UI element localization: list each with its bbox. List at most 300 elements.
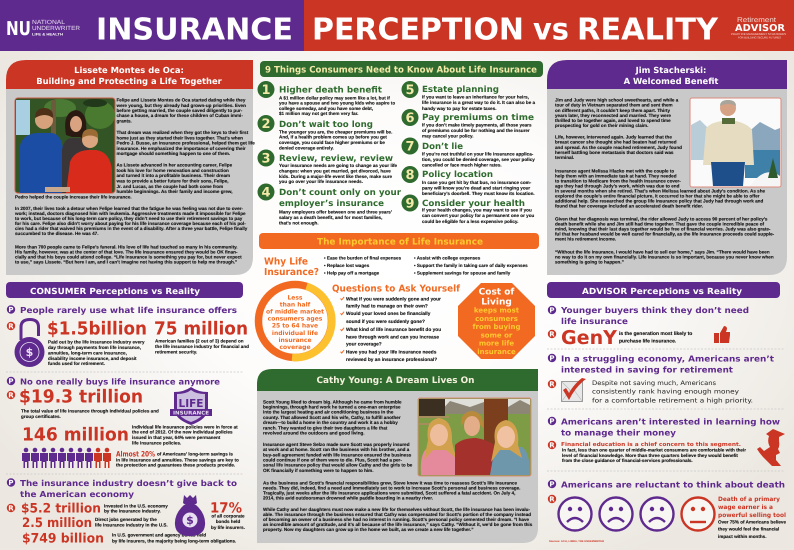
perception 1 heading [548, 305, 749, 326]
story text: beginnings, through hard work he turned a one-man enterprise [263, 404, 401, 410]
why life insurance: Insurance? [264, 267, 319, 278]
icon: row of ten people [22, 448, 111, 468]
perception 2 heading: interested in saving for retirement [561, 365, 733, 375]
item 2: coverage, you could face higher premiums or be [279, 140, 385, 145]
icon: checkbox with red check [562, 378, 586, 402]
panel: consumer perceptions vs reality [6, 282, 249, 547]
perception 3 heading [548, 416, 780, 438]
photo: family [15, 98, 115, 193]
item 1: 1 [261, 83, 271, 98]
perception 1 heading: Younger buyers think they don’t need [560, 305, 749, 315]
title: INSURANCE [96, 12, 293, 47]
stat: 2.5 million: Direct jobs generated by the [95, 517, 157, 522]
stat: $19.3 trillion: group certificates. [21, 414, 61, 419]
donut callout: 25 to 64 have [272, 323, 318, 330]
questions to ask yourself: your coverage? [346, 342, 382, 348]
perception 3 heading [7, 478, 237, 499]
questions to ask yourself: sound if you were suddenly gone? [346, 319, 425, 325]
heading: Cathy Young: A Dream Lives On [316, 376, 474, 386]
heading bar [259, 233, 539, 249]
item 5: handy way to pay for estate taxes. [422, 106, 497, 111]
item 2: 2 [261, 117, 271, 132]
item 6: may cancel your policy. [422, 134, 474, 138]
logo: National Underwriter: UNDERWRITER [32, 25, 81, 32]
icon: money bag [175, 495, 205, 536]
reality text: Despite not saving much, Americans [592, 380, 716, 387]
panel: Lissete Montes de Oca story [6, 60, 255, 275]
item 2 [258, 115, 392, 150]
story text: In 2007, their lives took a detour when Felipe learned that the fatigue he was feeling was not due to over- [15, 206, 243, 211]
item 3: you go over your life insurance needs. [279, 179, 363, 184]
story text [263, 399, 533, 532]
item 6: 6 [405, 111, 415, 126]
icon: money bag: $ [186, 514, 194, 527]
item 5: 5 [405, 83, 415, 98]
stat: 17% [210, 500, 245, 530]
story text: an incredible amount of gratitude, and it’s all because of the life insurance,” says Cathy. “Without it, we’d be gone from this [263, 522, 533, 527]
item 9: Consider your health [422, 199, 525, 209]
icon: life insurance shield badge: INSURANCE [173, 411, 210, 417]
story text: Insurance agent Steve Selzo made sure Scott was properly insured [263, 442, 410, 447]
item 4: Don’t count only on your [279, 188, 402, 198]
why life insurance: • Ease the burden of final expenses [324, 256, 402, 261]
stat: almost 20% [116, 450, 239, 468]
item 2: And, if a health problem comes up before you get [279, 135, 387, 140]
item 5: If you want to leave an inheritance for your heirs, [422, 95, 529, 100]
stop sign callout: cost of living: Cost of [479, 288, 514, 298]
stat: Gen Y: R [549, 330, 555, 338]
story text: county. That allowed Scott and his wife, Cathy, to fulfill another [263, 415, 401, 420]
heading bar [6, 282, 243, 298]
stat: $5.2 trillion: by the insurance industry. [104, 509, 161, 514]
item 3: changes: when you get married, get divorced, have [279, 168, 391, 173]
reality: financial education: level of financial knowledge. More than three quarters believe they would benefit [562, 453, 738, 458]
stat: $5.2 trillion: Invested in the U.S. economy [104, 503, 168, 508]
stop sign callout: cost of living: insurance [477, 348, 516, 356]
why life insurance: Why Life [264, 256, 308, 268]
perception 1 heading: People rarely use what life insurance offers [20, 305, 237, 315]
donut callout: than half [280, 301, 311, 308]
item 4: Many employers offer between one and three years’ [279, 209, 392, 214]
story text: property. Now my daughters can grow up in the home we built, as we create a new life together.” [263, 527, 474, 532]
perception 3 heading: P [549, 418, 555, 426]
item 8 [402, 166, 535, 196]
story text: Scott Young liked to dream big. Although he came from humble [263, 399, 402, 404]
stat: 17%: bonds held [216, 519, 240, 524]
heading bar [547, 282, 780, 298]
story text: found that her coverage included an accelerated death benefit rider. [555, 204, 703, 209]
item 7: cancelled or face much higher rates. [422, 162, 502, 168]
logo: Retirement Advisor: PRACTICE MANAGEMENT STRATEGIES [731, 32, 786, 36]
item 9: If your health changes, you may want to see if you [422, 208, 532, 213]
item 1: Higher death benefit [279, 86, 382, 96]
questions to ask yourself: What if you were suddenly gone and your [346, 296, 441, 302]
story text: cially and that his boys could attend college. “Life insurance is something you pay for, but never expect [15, 254, 242, 260]
item 8: beneficiary’s doorbell. They must know its location. [422, 191, 535, 196]
source note: Sources: ACLI, LIMRA, THE UNDERWRITER [549, 540, 604, 543]
icon: neutral red face [682, 498, 714, 530]
perception 3 heading: the American economy [20, 489, 135, 499]
stat: 75 million: 75 million [154, 318, 248, 340]
item 2: The younger you are, the cheaper premiums will be. [279, 129, 392, 134]
story text: mind, knowing that their last days together would be free of financial worries. Judy was also grate- [555, 227, 771, 232]
story text: Insurance agent Melissa Hlacko met with the couple to [555, 169, 674, 174]
item 5: life insurance is a great way to do it. It can also be a [422, 100, 536, 105]
story text: Given that her diagnosis was terminal, the rider allowed Judy to access 90 percent of her policy’s [555, 217, 768, 222]
donut callout: consumers ages [268, 316, 323, 323]
story text: ful that her husband would be well cared for financially, as the life insurance proceeds could supple- [555, 232, 775, 237]
stat: 146 million: the end of 2012. Of the new individual policies [132, 430, 233, 435]
story text: herself battling bone metastasis that doctors said was [555, 150, 674, 155]
stat: $1.5 billion: funds used for retirement. [48, 361, 105, 366]
item 8: In case you get hit by that bus, no insurance com- [422, 180, 532, 185]
stat: 146 million: life insurance policies. [132, 440, 181, 446]
story text: to transition to Medicare from the health insurance cover- [555, 179, 681, 184]
stat: Gen Y: purchase life insurance. [619, 339, 677, 345]
stat: almost 20%: Almost 20% [116, 450, 155, 458]
stop sign callout: cost of living: some or [481, 331, 513, 339]
story text: tour of duty in Vietnam separated them and sent them [555, 103, 673, 108]
story text: cies had a rider that waived his premiums in the event of a disability. After a three year battle, Felipe finally [15, 226, 248, 231]
item 4: 4 [261, 186, 271, 201]
icon: thumbs up [714, 326, 730, 343]
story text: death benefit while she and Jim still had time together. That gave the couple incredible peace of [555, 222, 765, 227]
story text: prospecting for gold on their mining claim. [555, 123, 648, 128]
story text: Jim and Judy were high school sweethearts, and while a [555, 98, 679, 103]
logo: Retirement Advisor: ADVISOR [735, 23, 786, 34]
panel: importance of life insurance [258, 233, 539, 363]
item 7: 7 [405, 140, 415, 155]
stat: 2.5 million: life insurance industry in the U.S. [95, 522, 168, 527]
item 1: A $1 million dollar policy may seem like a lot, but if [279, 95, 390, 100]
questions to ask yourself [332, 284, 461, 363]
reality text: for a comfortable retirement a high priority. [592, 397, 753, 404]
story text: ranch. They wanted to give their two daughters a life that [263, 425, 388, 430]
stat: $19.3 trillion: The total value of life insurance through individual policies and [21, 409, 159, 414]
icon: reality marker: R [549, 496, 555, 504]
story text: chase a house, a dream for these children of Cuban immi- [116, 113, 243, 118]
stat: 146 million: 146 million [22, 424, 129, 446]
why life insurance [264, 256, 528, 278]
why life insurance: • Supplement savings for spouse and family [414, 270, 511, 275]
panel: 9 things consumers need to know [258, 61, 543, 226]
stat: $5.2 trillion: R [8, 504, 14, 512]
perception 4 heading: Americans are reluctant to think about death [561, 480, 785, 490]
reality: financial education: Financial education is a chief concern to this segment. [561, 441, 741, 448]
stat: 17%: 17% [210, 500, 242, 516]
logo: National Underwriter: NU [6, 18, 31, 40]
perception 4 heading: P [549, 480, 555, 488]
story text: As Lissete advanced in her accounting career, Felipe [116, 163, 233, 168]
callout: death of primary wage earner: Over 75% of Americans believe [718, 519, 786, 524]
stop sign callout: cost of living: from buying [472, 323, 520, 331]
story text: terminal. [555, 155, 574, 160]
item 1: $1 million may not get them very far. [279, 111, 358, 116]
icon: reality marker: R [549, 380, 555, 388]
header banner [0, 0, 794, 51]
logo: National Underwriter: LIFE & HEALTH [32, 32, 63, 36]
stat: $749 billion: by life insurers, the majority being long-term obligations. [112, 538, 236, 543]
story text: grants. [116, 118, 132, 123]
callout: death of primary wage earner: they would feel the financial [718, 527, 779, 532]
questions to ask yourself: Questions to Ask Yourself [332, 284, 461, 294]
perception 1 heading: P [8, 306, 14, 314]
stat: Gen Y [548, 327, 692, 349]
title: PERCEPTION [312, 12, 524, 47]
story text: age they had through Judy’s work, which was due to end [555, 184, 680, 189]
heading bar: ADVISOR Perceptions vs Reality [582, 286, 743, 296]
story text: was to provide a better future for their sons, Felipe, [116, 178, 229, 184]
item 1: college someday, and you have some debt, [279, 106, 373, 111]
stat: $1.5 billion: disability income insurance, and deposit [48, 356, 137, 361]
icon: padlock with dollar [14, 320, 44, 367]
donut callout: individual life [272, 330, 318, 337]
stat: almost 20%: in life insurance and annuities. These savings are key to [116, 457, 239, 462]
story text: While Cathy and her daughters must now make a new life for themselves without Scott, the life insurance has been invalu- [263, 507, 530, 512]
questions to ask yourself: family had to manage on their own? [346, 304, 428, 310]
story text: thrilled to be together again, and loved to spend time [555, 118, 671, 123]
story text: could continue if one of them were to die. Plus, Scott had a per- [263, 458, 402, 462]
story text: More than 700 people came to Felipe’s funeral. His love of life had touched so many in his community. [15, 244, 238, 249]
story text: “Without the life insurance, I would have had to sell our home,” says Jim. “There would have been [555, 250, 770, 255]
story text [14, 98, 255, 265]
stop sign callout: cost of living: Living [481, 297, 512, 307]
title [96, 12, 719, 47]
item 3: kids. During a major-life event like these, make sure [279, 174, 393, 179]
story text [555, 98, 775, 265]
perception 3 heading: to manage their money [561, 428, 677, 438]
heading: Building and Protecting a Life Together [36, 76, 223, 86]
stat: $19.3 trillion: $19.3 trillion [19, 386, 143, 408]
story text: something is going to happen.” [555, 260, 624, 265]
story text: of becoming an owner of a business she had no interest in running. Scott’s personal policy cemented their dream. “I have [263, 517, 530, 522]
item 4: salary as a death benefit, and for most families, [279, 215, 382, 220]
stat: 75 million: the life insurance industry for financial and [155, 344, 249, 349]
item 2: denied coverage entirely. [279, 146, 334, 150]
item 7 [402, 138, 535, 168]
perception 1 heading: P [549, 306, 555, 314]
story text: Felipe and Lissete Montes de Oca started dating while they [116, 98, 246, 103]
donut callout [258, 284, 332, 358]
story text: OK financially if something were to happen to him. [263, 468, 374, 473]
panel: Cathy Young story [257, 369, 538, 543]
perception 2 heading: P [8, 378, 14, 386]
reality: financial education: R [549, 442, 555, 450]
stat: $1.5 billion: Paid out by the life insurance industry every [48, 340, 145, 345]
item 3: 3 [261, 152, 271, 167]
donut callout: coverage [279, 344, 311, 351]
story text: years later, they reconnected and married. They were [555, 113, 671, 118]
stat: almost 20%: of Americans’ long-term savings is [157, 452, 233, 457]
heading: Lissete Montes de Oca: [74, 65, 184, 75]
stat: 17%: of all corporate [211, 514, 245, 519]
story text: humble beginnings. As their family and income grew, [116, 189, 233, 194]
item 9: 9 [405, 197, 415, 212]
callout: death of primary wage earner: wage earner is a [718, 504, 773, 511]
why life insurance: • Assist with college expenses [414, 256, 481, 261]
callout: death of primary wage earner [718, 496, 786, 539]
icon: graduate silhouette [757, 429, 785, 466]
questions to ask yourself: What kind of life insurance benefit do you [346, 327, 441, 333]
stat: 2.5 million: 2.5 million [22, 516, 92, 531]
item 8: Policy location [422, 170, 493, 180]
story text: His family, however, was at the center of that love. The life insurance ensured they would be OK finan- [15, 249, 238, 254]
story text: insurance. He emphasized the importance of covering their [116, 146, 246, 151]
icon: life insurance shield badge: LIFE [178, 397, 204, 410]
stat: $19.3 trillion: R [8, 392, 14, 400]
stat: $19.3 trillion [7, 386, 159, 419]
item 4: employer’s insurance [279, 199, 384, 209]
stat: $1.5 billion: day through payments from life insurance, [48, 345, 141, 350]
item 7: tion, you could be denied coverage, see your policy [422, 157, 535, 162]
stat: $5.2 trillion [7, 502, 168, 517]
stat: $749 billion: In U.S. government and agency bonds held [112, 533, 206, 538]
perception 2 heading: P [549, 354, 555, 362]
story text: additional help. She researched the group life insurance policy that Judy had through work and [555, 199, 763, 204]
logo: National Underwriter [6, 18, 81, 40]
story text: were young, but they already had grown-up priorities. Even [116, 103, 246, 108]
item 7: If you’re not truthful on your life insurance applica- [422, 151, 534, 156]
story text: help them with an immediate task at hand. They needed [555, 174, 677, 179]
story text: on different paths, it couldn’t keep them apart. Thirty [555, 108, 671, 113]
story text: Tragically, just weeks after the life insurance applications were submitted, Scott suffered a fatal accident. On July 4, [263, 490, 515, 495]
logo: Retirement Advisor: Retirement [737, 16, 776, 24]
icon: life insurance shield badge [170, 387, 212, 425]
item 6: of premiums could be for nothing and the insurer [422, 128, 530, 133]
story text: Pedro helped the couple increase their life insurance. [15, 194, 132, 199]
why life insurance: • Support the family in taking care of daily expenses [414, 263, 528, 268]
callout: death of primary wage earner: impact within months. [718, 534, 766, 539]
reality: financial education [548, 441, 746, 463]
panel: advisor perceptions vs reality [547, 282, 786, 543]
perception 2 heading: In a struggling economy, Americans aren’t [561, 354, 774, 364]
item 5: Estate planning [422, 85, 499, 95]
icon: reality marker: R [8, 322, 14, 330]
item 4: that’s not enough. [279, 220, 319, 226]
item 9 [402, 194, 535, 224]
item 9: could be eligible for a less expensive policy. [422, 219, 518, 224]
stat: $5.2 trillion: $5.2 trillion [21, 502, 101, 517]
story text: explored the couple’s entire financial picture, it occurred to her that she might be able to offer [555, 194, 760, 199]
story text: buy-sell agreement funded with life insurance ensured the business [263, 452, 412, 457]
item 3: Review, review, review [279, 154, 393, 164]
stat: almost 20%: the protection and guarantees these products provide. [116, 463, 235, 468]
title: vs [533, 12, 569, 47]
logo: Retirement Advisor [731, 16, 786, 40]
story text: 2014, this avid outdoorsman drowned while paddle boarding in a nearby river. [263, 495, 433, 500]
perception 2 heading [548, 354, 774, 375]
icon: reality marker [7, 322, 15, 330]
heading: A Welcomed Benefit [624, 76, 718, 86]
story text: breast cancer she thought she had beaten had returned [555, 140, 677, 145]
story text: able. The insurance through the business ensured that Cathy was compensated for Scott’s portion of the company instead [263, 512, 531, 517]
logo: Retirement Advisor: FOR BUILDING SECURE FUTURES [738, 36, 781, 40]
perception 2 heading: No one really buys life insurance anymore [20, 376, 220, 386]
stat: $749 billion [22, 532, 236, 547]
photo: Jim [690, 98, 781, 187]
item 1 [258, 81, 395, 116]
story text: before getting married, the couple saved diligently to pur- [116, 108, 243, 113]
stat: 75 million: retirement security. [155, 349, 197, 354]
perception 3 heading: Americans aren’t interested in learning how [561, 416, 780, 426]
stop sign callout: cost of living: more life [479, 340, 514, 348]
stop sign callout: cost of living: keeps most [474, 306, 520, 314]
heading bar: 9 Things Consumers Need to Know About Life Insurance [265, 66, 537, 76]
item 7: Don’t lie [422, 142, 463, 152]
stat: 17%: by life insurers. [211, 525, 245, 530]
item 8: pany will know you’re dead and start ringing your [422, 186, 530, 191]
heading bar: CONSUMER Perceptions vs Reality [30, 286, 201, 296]
story text: and spread. As the couple reached retirement, Judy found [555, 145, 682, 150]
item 4 [258, 184, 402, 226]
logo: National Underwriter: NATIONAL [32, 19, 66, 26]
item 6: Pay premiums on time [422, 113, 534, 123]
story text: mortgage should something happen to one of them. [116, 151, 230, 156]
heading: Jim Stacherski: [635, 65, 706, 75]
perception 1 heading: life insurance [561, 316, 628, 326]
story text: home just as they started their lives together. That’s when [116, 135, 243, 140]
item 2: Don’t wait too long [279, 120, 373, 130]
story text: to work, but because of his long-term care policy, they didn’t need to use their retirement savings to pay [15, 216, 243, 221]
story text: needs. They did, indeed, find a need and immediately set to work to increase Scott’s personal and business coverage. [263, 485, 520, 490]
story text: That dream was realized when they got the keys to their first [116, 130, 249, 135]
reality: financial education: from the close guidance of financial-services professionals. [562, 458, 693, 463]
item 6: If you don’t make timely payments, all those years [422, 122, 532, 127]
callout: death of primary wage earner: powerful selling tool [718, 512, 786, 519]
icon: reality marker [548, 495, 556, 504]
story text: work; instead, doctors diagnosed him with leukemia. Aggressive treatments made it impossible for Felipe [14, 211, 246, 216]
stat: $749 billion: $749 billion [22, 532, 104, 547]
perception 3 heading: The insurance industry doesn’t give back to [20, 478, 237, 488]
story text: took his love for home renovation and construction [116, 168, 229, 173]
reality: financial education: In fact, less than one quarter of middle-market consumers are comfortable with their [562, 448, 746, 453]
icon: three sad faces [558, 498, 674, 530]
donut callout: of middle market [266, 308, 324, 316]
questions to ask yourself: Have you had your life insurance needs [346, 349, 437, 355]
story text: in several months when she retired. That’s when Melissa learned about Judy’s condition. As she [555, 189, 766, 194]
heading bar [260, 61, 543, 77]
item 8: 8 [405, 168, 415, 183]
stat: Gen Y: is the generation most likely to [619, 331, 692, 337]
story text: to use,” says Lissete. “But here I am, and I can’t imagine not having this support to help me through.” [15, 260, 237, 265]
stat: 75 million [154, 318, 249, 354]
story text: succumbed to the disease. He was 47. [15, 231, 98, 236]
questions to ask yourself: Would your loved ones be financially [346, 311, 431, 317]
stat: 75 million: American families (2 out of 3) depend on [155, 339, 244, 344]
story text: at work and at home. Scott ran the business with his brother, and a [263, 447, 410, 452]
questions to ask yourself: have through work and can you increase [346, 334, 439, 340]
story text: sonal life insurance policy that would allow Cathy and the girls to be [263, 463, 413, 468]
story text: into the largest heating and air conditioning business in the [263, 410, 394, 415]
panel: Jim Stacherski story [547, 60, 787, 275]
stat: $1.5 billion: annuities, long-term care insurance, [48, 350, 127, 355]
donut callout: Less [287, 294, 303, 301]
item 3: Your insurance needs are going to change as your life [279, 163, 398, 168]
stat: $1.5 billion [47, 318, 147, 366]
story text: and turned it into a profitable business. Their dream [116, 173, 230, 178]
story text: dream—to build a home in the country and work it as a hobby [263, 420, 398, 425]
stat: 146 million [22, 424, 238, 446]
stat: $1.5 billion: $1.5billion [47, 318, 147, 340]
story text: ment his retirement income. [555, 237, 616, 242]
stat: Gen Y: GenY [561, 327, 617, 349]
reality text: consistently rank having enough money [592, 388, 739, 395]
why life insurance: • Replace lost wages [324, 263, 370, 268]
item 5 [402, 81, 536, 111]
icon: reality marker [548, 380, 556, 388]
icon: padlock with dollar: $ [26, 346, 33, 359]
why life insurance: • Help pay off a mortgage [324, 270, 380, 275]
